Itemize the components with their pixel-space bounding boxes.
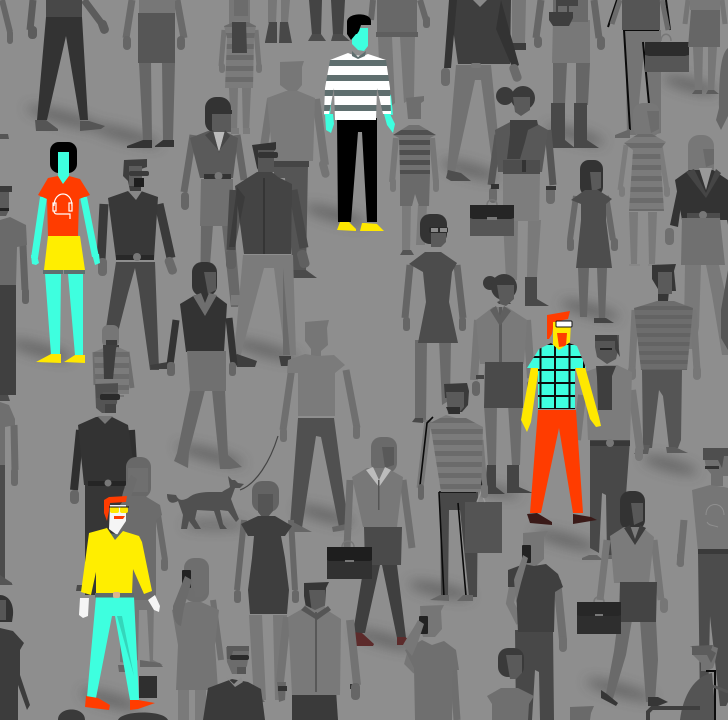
person: man in hoodie bottom (277, 582, 360, 720)
person: top left man in dark trousers (28, 0, 110, 131)
person: woman with black jacket (167, 262, 242, 469)
person: man in striped sweater (628, 264, 701, 454)
person: man with moustache and scarf (577, 335, 643, 560)
person: small woman with scarf (94, 325, 132, 397)
person: man in black sweater with beard and sunglasses (70, 383, 134, 595)
person: woman in blazer (327, 437, 413, 646)
person: highlighted woman in red tee and yellow shorts (31, 142, 100, 363)
dog on a leash (167, 436, 278, 529)
person: man with black outlines and briefcase (608, 0, 689, 138)
person: right man with headset tee (677, 448, 728, 706)
person: woman with bob and glasses (403, 214, 466, 423)
person: man in black sweater with beard (98, 159, 178, 370)
person: woman in dark dress (567, 160, 618, 323)
person: right edge figure (721, 270, 728, 350)
person: hoodie man with sunglasses (226, 142, 310, 367)
person: man on phone bottom (403, 605, 459, 720)
person: legs with boots (265, 0, 292, 43)
person: far left arm (0, 0, 13, 139)
person: man in black sweater bottom (203, 646, 265, 720)
person: woman in skirt top (123, 0, 185, 148)
person: woman in black biker jacket right (665, 135, 728, 355)
person: man in wheelchair (648, 645, 728, 720)
person: woman with phone behind yellow man (116, 457, 168, 672)
person: woman in jacket with sunglasses (181, 97, 244, 307)
person: man in tee walking a dog (280, 320, 360, 532)
person: highlighted man in plaid shirt and orange trousers (521, 311, 601, 525)
person: man in black sweater top (441, 0, 526, 181)
person: woman in blazer with briefcase (577, 491, 668, 706)
person: woman with scarf and briefcase (470, 86, 556, 306)
person: woman with bob bottom (487, 648, 534, 720)
person: dark legs (308, 0, 350, 41)
person: left edge man (0, 402, 18, 585)
person: left edge man with moustache (0, 186, 29, 401)
person: woman in cardigan (472, 274, 535, 494)
person: left bottom woman (0, 595, 30, 720)
person: striped tee boy (390, 96, 439, 255)
person: bottom left dark heads (58, 676, 168, 720)
person: highlighted man in striped shirt (324, 14, 395, 231)
person: woman with phone (172, 558, 221, 720)
person: man with phone (508, 531, 567, 720)
person: woman with purse and boots (534, 0, 605, 148)
person: highlighted man in yellow sweater (79, 496, 160, 710)
person: man seen from behind (262, 61, 330, 278)
person: woman with scarf in striped dress (219, 0, 262, 134)
person: woman with striped dress (619, 103, 670, 266)
person: head at bottom edge (570, 706, 594, 720)
person: woman with bob black dress (234, 481, 299, 702)
person: man with beard and black outline with shopping bag (418, 383, 502, 601)
person: arm at right edge (716, 48, 728, 130)
person: woman top right (685, 0, 725, 94)
person: woman in shorts top (371, 0, 430, 111)
